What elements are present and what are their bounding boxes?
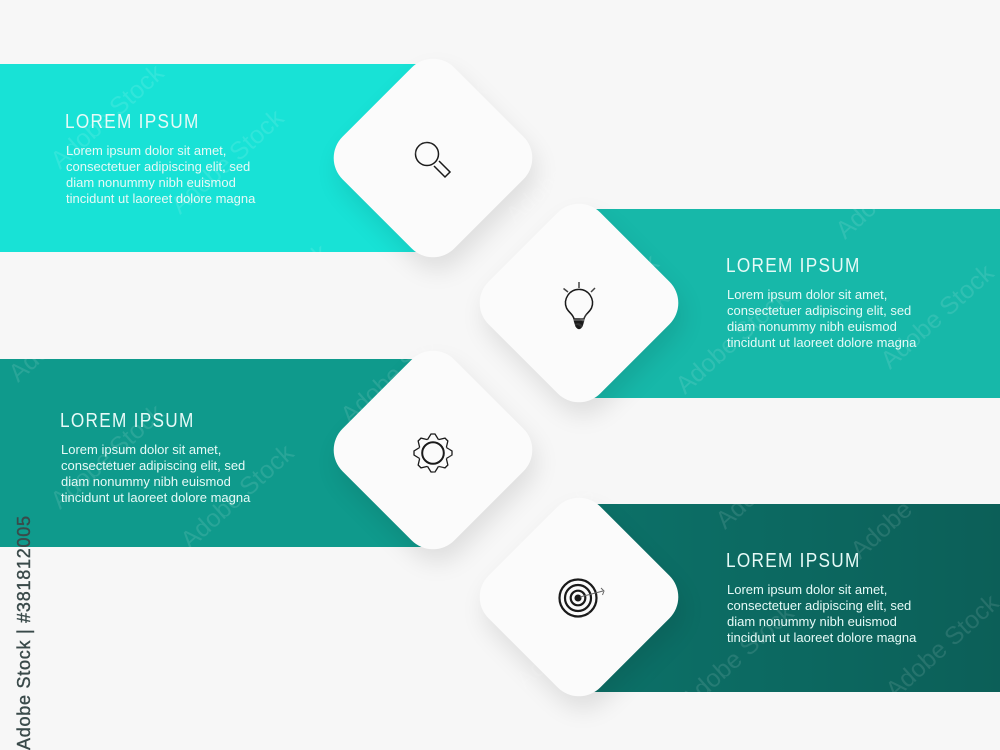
watermark: Adobe Stock	[705, 83, 830, 199]
text block 3	[60, 410, 250, 505]
watermark: Adobe Stock	[710, 418, 835, 534]
text block 2	[726, 255, 916, 350]
body text 4: diam nonummy nibh euismod	[727, 614, 897, 629]
body text 2: Lorem ipsum dolor sit amet,	[727, 287, 887, 302]
vertical stock id text: Adobe Stock | #381812005	[14, 516, 34, 750]
watermark: Adobe Stock	[3, 271, 128, 387]
watermark: Adobe Stock	[165, 103, 290, 219]
heading 2: LOREM IPSUM	[726, 255, 861, 277]
body text 1: consectetuer adipiscing elit, sed	[66, 159, 250, 174]
panel: diamond 3	[321, 338, 545, 562]
body text 1: Lorem ipsum dolor sit amet,	[66, 143, 226, 158]
watermark: Adobe Stock	[510, 578, 635, 694]
panel: bar 2	[570, 209, 1000, 398]
watermark: Adobe Stock	[210, 238, 335, 354]
body text 3	[61, 442, 250, 505]
watermark: Adobe Stock	[845, 448, 970, 564]
watermark: Adobe Stock	[540, 248, 665, 364]
heading 1: LOREM IPSUM	[65, 111, 200, 133]
body text 4: tincidunt ut laoreet dolore magna	[727, 630, 916, 645]
panel: diamond 2	[467, 191, 691, 415]
body text 4	[727, 582, 916, 645]
body text 2: consectetuer adipiscing elit, sed	[727, 303, 911, 318]
text block 1	[65, 111, 256, 206]
watermark: Adobe Stock	[45, 398, 170, 514]
watermark: Adobe Stock	[380, 408, 505, 524]
watermark: Adobe Stock	[500, 113, 625, 229]
heading 4: LOREM IPSUM	[726, 550, 861, 572]
watermark: Adobe Stock	[15, 598, 140, 714]
panel: bar 1	[0, 64, 440, 252]
body text 4: consectetuer adipiscing elit, sed	[727, 598, 911, 613]
watermark: Adobe Stock	[670, 283, 795, 399]
body text 2: diam nonummy nibh euismod	[727, 319, 897, 334]
watermark: Adobe Stock	[510, 448, 635, 564]
watermark: Adobe Stock	[45, 58, 170, 174]
body text 2: tincidunt ut laoreet dolore magna	[727, 335, 916, 350]
panel: bar 3	[0, 359, 440, 547]
text block 4	[726, 550, 916, 645]
body text 2	[727, 287, 916, 350]
watermark: Adobe Stock	[830, 128, 955, 244]
watermark: Adobe Stock	[175, 438, 300, 554]
watermark: Adobe Stock	[368, 75, 493, 191]
body text 3: tincidunt ut laoreet dolore magna	[61, 490, 250, 505]
body text 3: Lorem ipsum dolor sit amet,	[61, 442, 221, 457]
watermark: Adobe Stock	[875, 258, 1000, 374]
body text 1: diam nonummy nibh euismod	[66, 175, 236, 190]
body text 3: diam nonummy nibh euismod	[61, 474, 231, 489]
body text 4: Lorem ipsum dolor sit amet,	[727, 582, 887, 597]
panel: diamond 1	[321, 46, 545, 270]
panel: diamond 4	[467, 485, 691, 709]
watermark: Adobe Stock	[345, 613, 470, 729]
heading 3: LOREM IPSUM	[60, 410, 195, 432]
watermark: Adobe Stock	[215, 543, 340, 659]
body text 3: consectetuer adipiscing elit, sed	[61, 458, 245, 473]
watermark: Adobe Stock	[675, 598, 800, 714]
body text 1: tincidunt ut laoreet dolore magna	[66, 191, 255, 206]
watermark: Adobe Stock	[335, 313, 460, 429]
panel: bar 4	[570, 504, 1000, 692]
body text 1	[66, 143, 256, 206]
